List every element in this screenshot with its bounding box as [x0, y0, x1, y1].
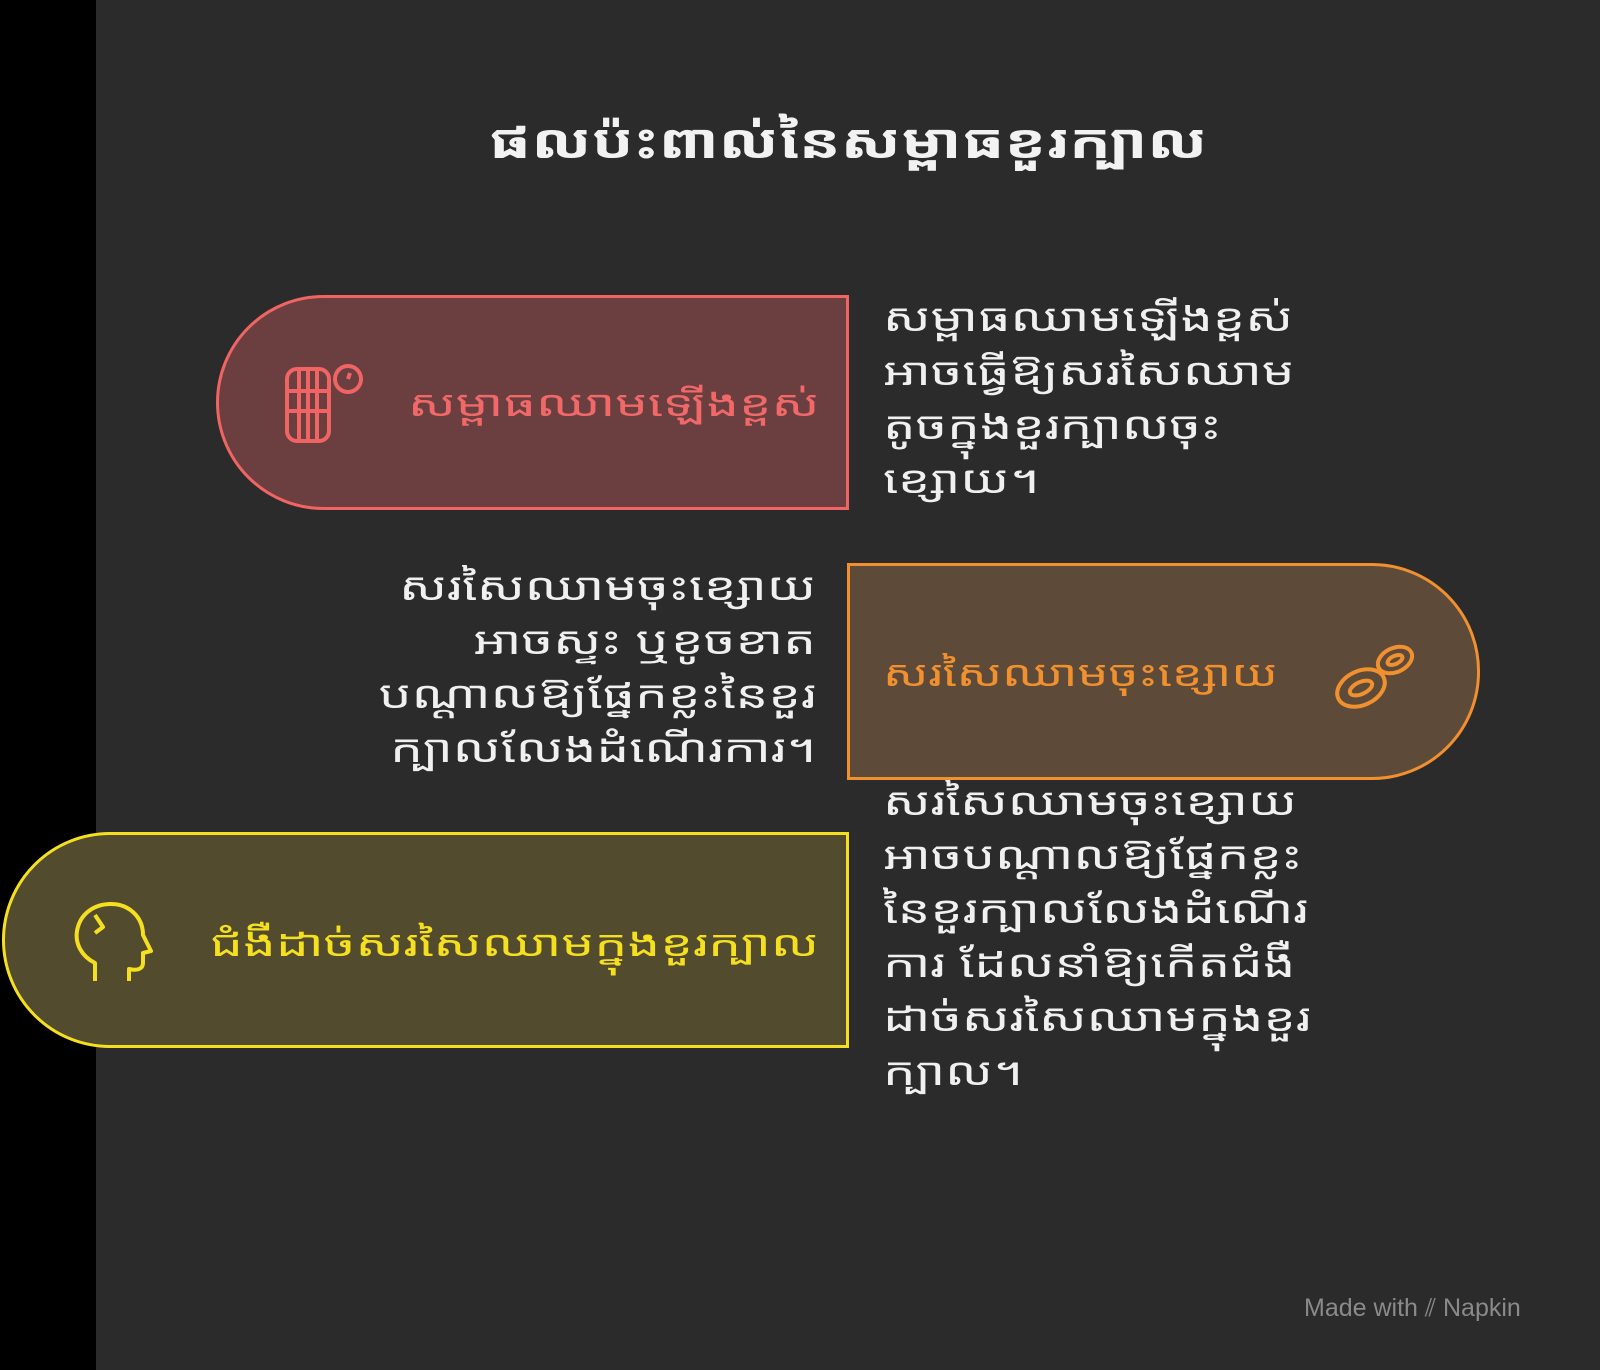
text block: weakened vessels desc: សរសៃឈាមចុះខ្សោយ: [399, 567, 816, 609]
label: ជំងឺដាច់សរសៃឈាមក្នុងខួរក្បាល: [210, 923, 819, 964]
text block: weakened vessels desc: ក្បាលលែងដំណើរការ។: [390, 729, 816, 771]
text block: high pressure desc: ខ្សោយ។: [883, 460, 1039, 502]
text block: weakened vessels desc: អាចស្ទះ ឬខូចខាត: [473, 621, 816, 663]
panel: high blood pressure: [216, 295, 849, 510]
text block: weakened vessels desc: បណ្តាលឱ្យផ្នែកខ្លះនៃខួរ: [379, 675, 816, 717]
text block: stroke desc: សរសៃឈាមចុះខ្សោយ: [883, 782, 1297, 824]
icon: blood pressure: [285, 364, 363, 443]
text block: high pressure desc: អាចធ្វើឱ្យសរសៃឈាម: [883, 352, 1294, 394]
text block: high pressure desc: សម្ពាធឈាមឡើងខ្ពស់: [883, 298, 1293, 340]
text block: high pressure desc: [883, 297, 1294, 502]
text block: stroke desc: អាចបណ្តាលឱ្យផ្នែកខ្លះ: [883, 836, 1302, 878]
label: សរសៃឈាមចុះខ្សោយ: [883, 653, 1278, 694]
text block: weakened vessels desc: [379, 565, 816, 772]
text block: stroke desc: ការ ដែលនាំឱ្យកើតជំងឺ: [883, 944, 1295, 986]
label: សម្ពាធឈាមឡើងខ្ពស់: [408, 383, 819, 424]
text block: high pressure desc: តូចក្នុងខួរក្បាលចុះ: [883, 406, 1221, 448]
panel: weakened vessels: [847, 563, 1480, 780]
panel: stroke: [2, 832, 849, 1048]
title: ផលប៉ះពាល់នៃសម្ពាធខួរក្បាល: [489, 116, 1207, 169]
text block: stroke desc: [883, 780, 1311, 1094]
icon: head: [74, 902, 153, 981]
text block: stroke desc: ក្បាល។: [883, 1052, 1023, 1094]
text block: stroke desc: នៃខួរក្បាលលែងដំណើរ: [883, 890, 1308, 932]
text block: stroke desc: ដាច់សរសៃឈាមក្នុងខួរ: [883, 998, 1311, 1040]
watermark: Made with ⫽ Napkin: [1304, 1294, 1521, 1322]
icon: blood cells: [1335, 644, 1414, 709]
